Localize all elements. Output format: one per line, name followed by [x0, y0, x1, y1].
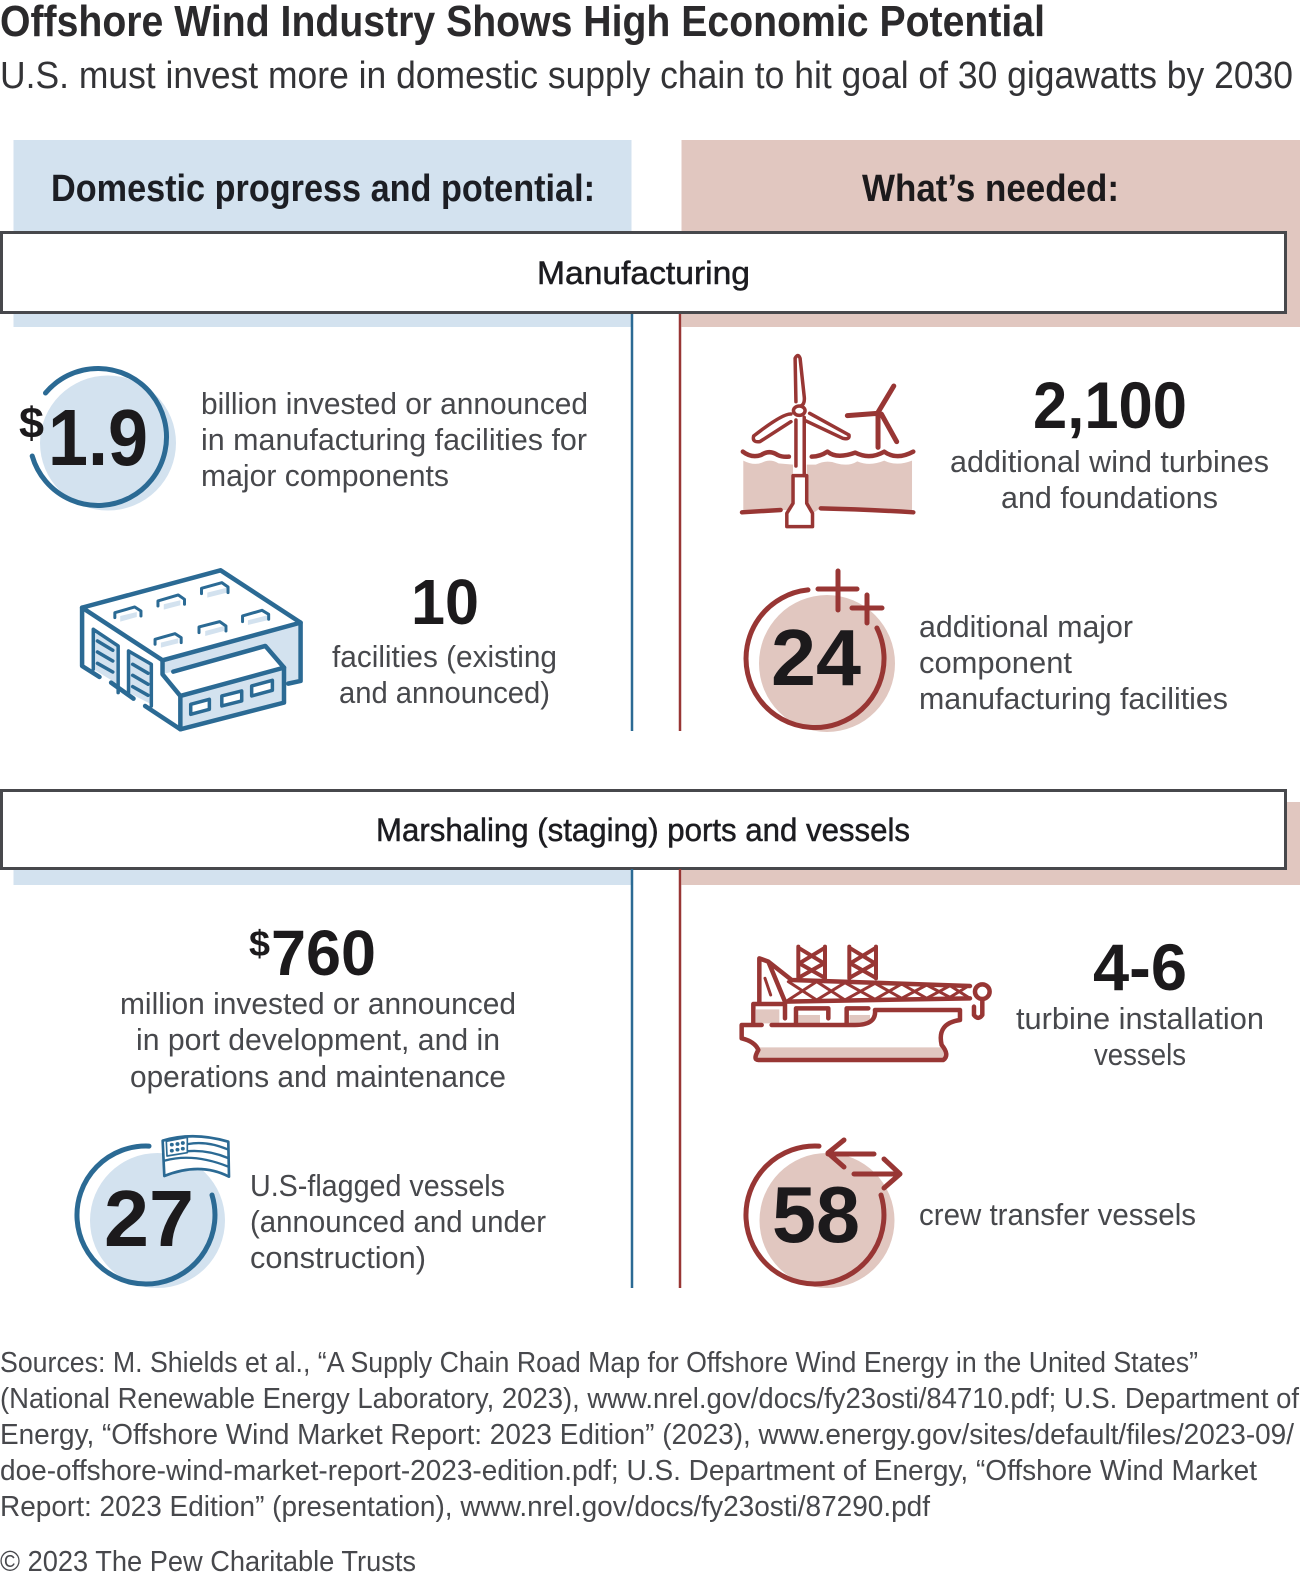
text: major component facilities: manufacturing facilities — [919, 681, 1228, 716]
panel: what's needed header — [682, 140, 1300, 327]
text: turbine installation vessels: turbine installation — [1016, 1001, 1264, 1036]
divider: manufacturing left — [631, 314, 633, 731]
text: turbine installation vessels — [1016, 1001, 1264, 1072]
text: billion invested — [201, 386, 588, 493]
text: wind turbines: additional wind turbines — [950, 444, 1269, 479]
number: 2,100: 2,100 — [1033, 368, 1187, 442]
sources: Report: 2023 Edition” (presentation), www.nrel.gov/docs/fy23osti/87290.pdf — [0, 1491, 931, 1523]
text: major component facilities — [919, 609, 1228, 716]
number: 27: 27 — [104, 1174, 194, 1263]
icon: factory building — [82, 570, 301, 729]
sources: Sources: M. Shields et al., “A Supply Chain Road Map for Offshore Wind Energy in the United States” — [0, 1347, 1198, 1379]
divider: manufacturing right — [679, 314, 681, 731]
icon: red circle with arrows — [746, 1140, 900, 1288]
text: port development: million invested or announced — [120, 986, 516, 1021]
sources — [0, 1347, 1300, 1523]
text: turbine installation vessels: vessels — [1094, 1037, 1186, 1072]
text: U.S-flagged vessels: (announced and under — [250, 1204, 546, 1239]
icon: red circle with plus signs — [746, 571, 895, 732]
text: U.S-flagged vessels: construction) — [250, 1240, 426, 1275]
divider: ports right — [679, 869, 681, 1288]
text: major component facilities: component — [919, 645, 1072, 680]
band tint: marshaling right — [682, 802, 1300, 885]
number: 1.9: 1.9 — [48, 393, 148, 482]
text: U.S-flagged vessels: U.S-flagged vessels — [250, 1168, 505, 1203]
icon: blue circle with flag — [77, 1136, 229, 1288]
section heading: marshaling: Marshaling (staging) ports and vessels — [376, 812, 910, 848]
heading: what's needed: What’s needed: — [862, 168, 1119, 210]
number: 24: 24 — [771, 613, 862, 702]
text: major component facilities: additional major — [919, 609, 1133, 644]
text: facilities: and announced) — [339, 675, 550, 710]
stat: 24 facilities — [746, 571, 1228, 732]
text: wind turbines — [950, 444, 1269, 515]
text: crew transfer vessels: crew transfer vessels — [919, 1197, 1196, 1232]
number: 760: 760 — [271, 917, 376, 989]
stat: $1.9 billion invested — [19, 368, 588, 510]
stat: 4-6 installation vessels — [1016, 930, 1264, 1072]
icon: offshore wind turbines — [742, 355, 913, 527]
icon: blue circle — [32, 368, 176, 510]
stat: 27 U.S.-flagged vessels — [77, 1136, 546, 1288]
stat: $760 million — [120, 917, 516, 1094]
text: billion invested: in manufacturing facilities for — [201, 422, 587, 457]
icon: turbine installation vessel — [742, 947, 990, 1060]
text: port development — [120, 986, 516, 1094]
section heading: manufacturing: Manufacturing — [537, 255, 750, 291]
divider: ports left — [631, 869, 633, 1288]
panel: domestic progress header — [14, 140, 632, 327]
number: $: $ — [19, 399, 44, 448]
text: facilities: facilities (existing — [332, 639, 557, 674]
text: billion invested: billion invested or announced — [201, 386, 588, 421]
sources: doe-offshore-wind-market-report-2023-edition.pdf; U.S. Department of Energy, “Offshore Wind Market — [0, 1455, 1257, 1487]
text: wind turbines: and foundations — [1001, 480, 1218, 515]
text: facilities — [332, 639, 557, 710]
number: 10: 10 — [411, 566, 479, 638]
stat: 10 facilities — [332, 566, 557, 710]
copyright: © 2023 The Pew Charitable Trusts — [0, 1546, 416, 1578]
section band: marshaling ports and vessels — [2, 790, 1286, 868]
text: port development: in port development, and in — [136, 1022, 500, 1057]
stat: 2,100 wind turbines — [950, 368, 1269, 515]
heading: domestic progress and potential: Domestic progress and potential: — [51, 168, 595, 210]
text: port development: operations and maintenance — [130, 1059, 506, 1094]
band tint: marshaling left — [14, 869, 632, 885]
number: 58: 58 — [772, 1170, 860, 1259]
number: 4-6: 4-6 — [1093, 930, 1187, 1004]
number: $: $ — [249, 923, 270, 964]
text: U.S-flagged vessels — [250, 1168, 546, 1275]
text: billion invested: major components — [201, 458, 449, 493]
section band: manufacturing — [2, 232, 1286, 312]
stat: 58 crew transfer vessels — [746, 1140, 1196, 1288]
